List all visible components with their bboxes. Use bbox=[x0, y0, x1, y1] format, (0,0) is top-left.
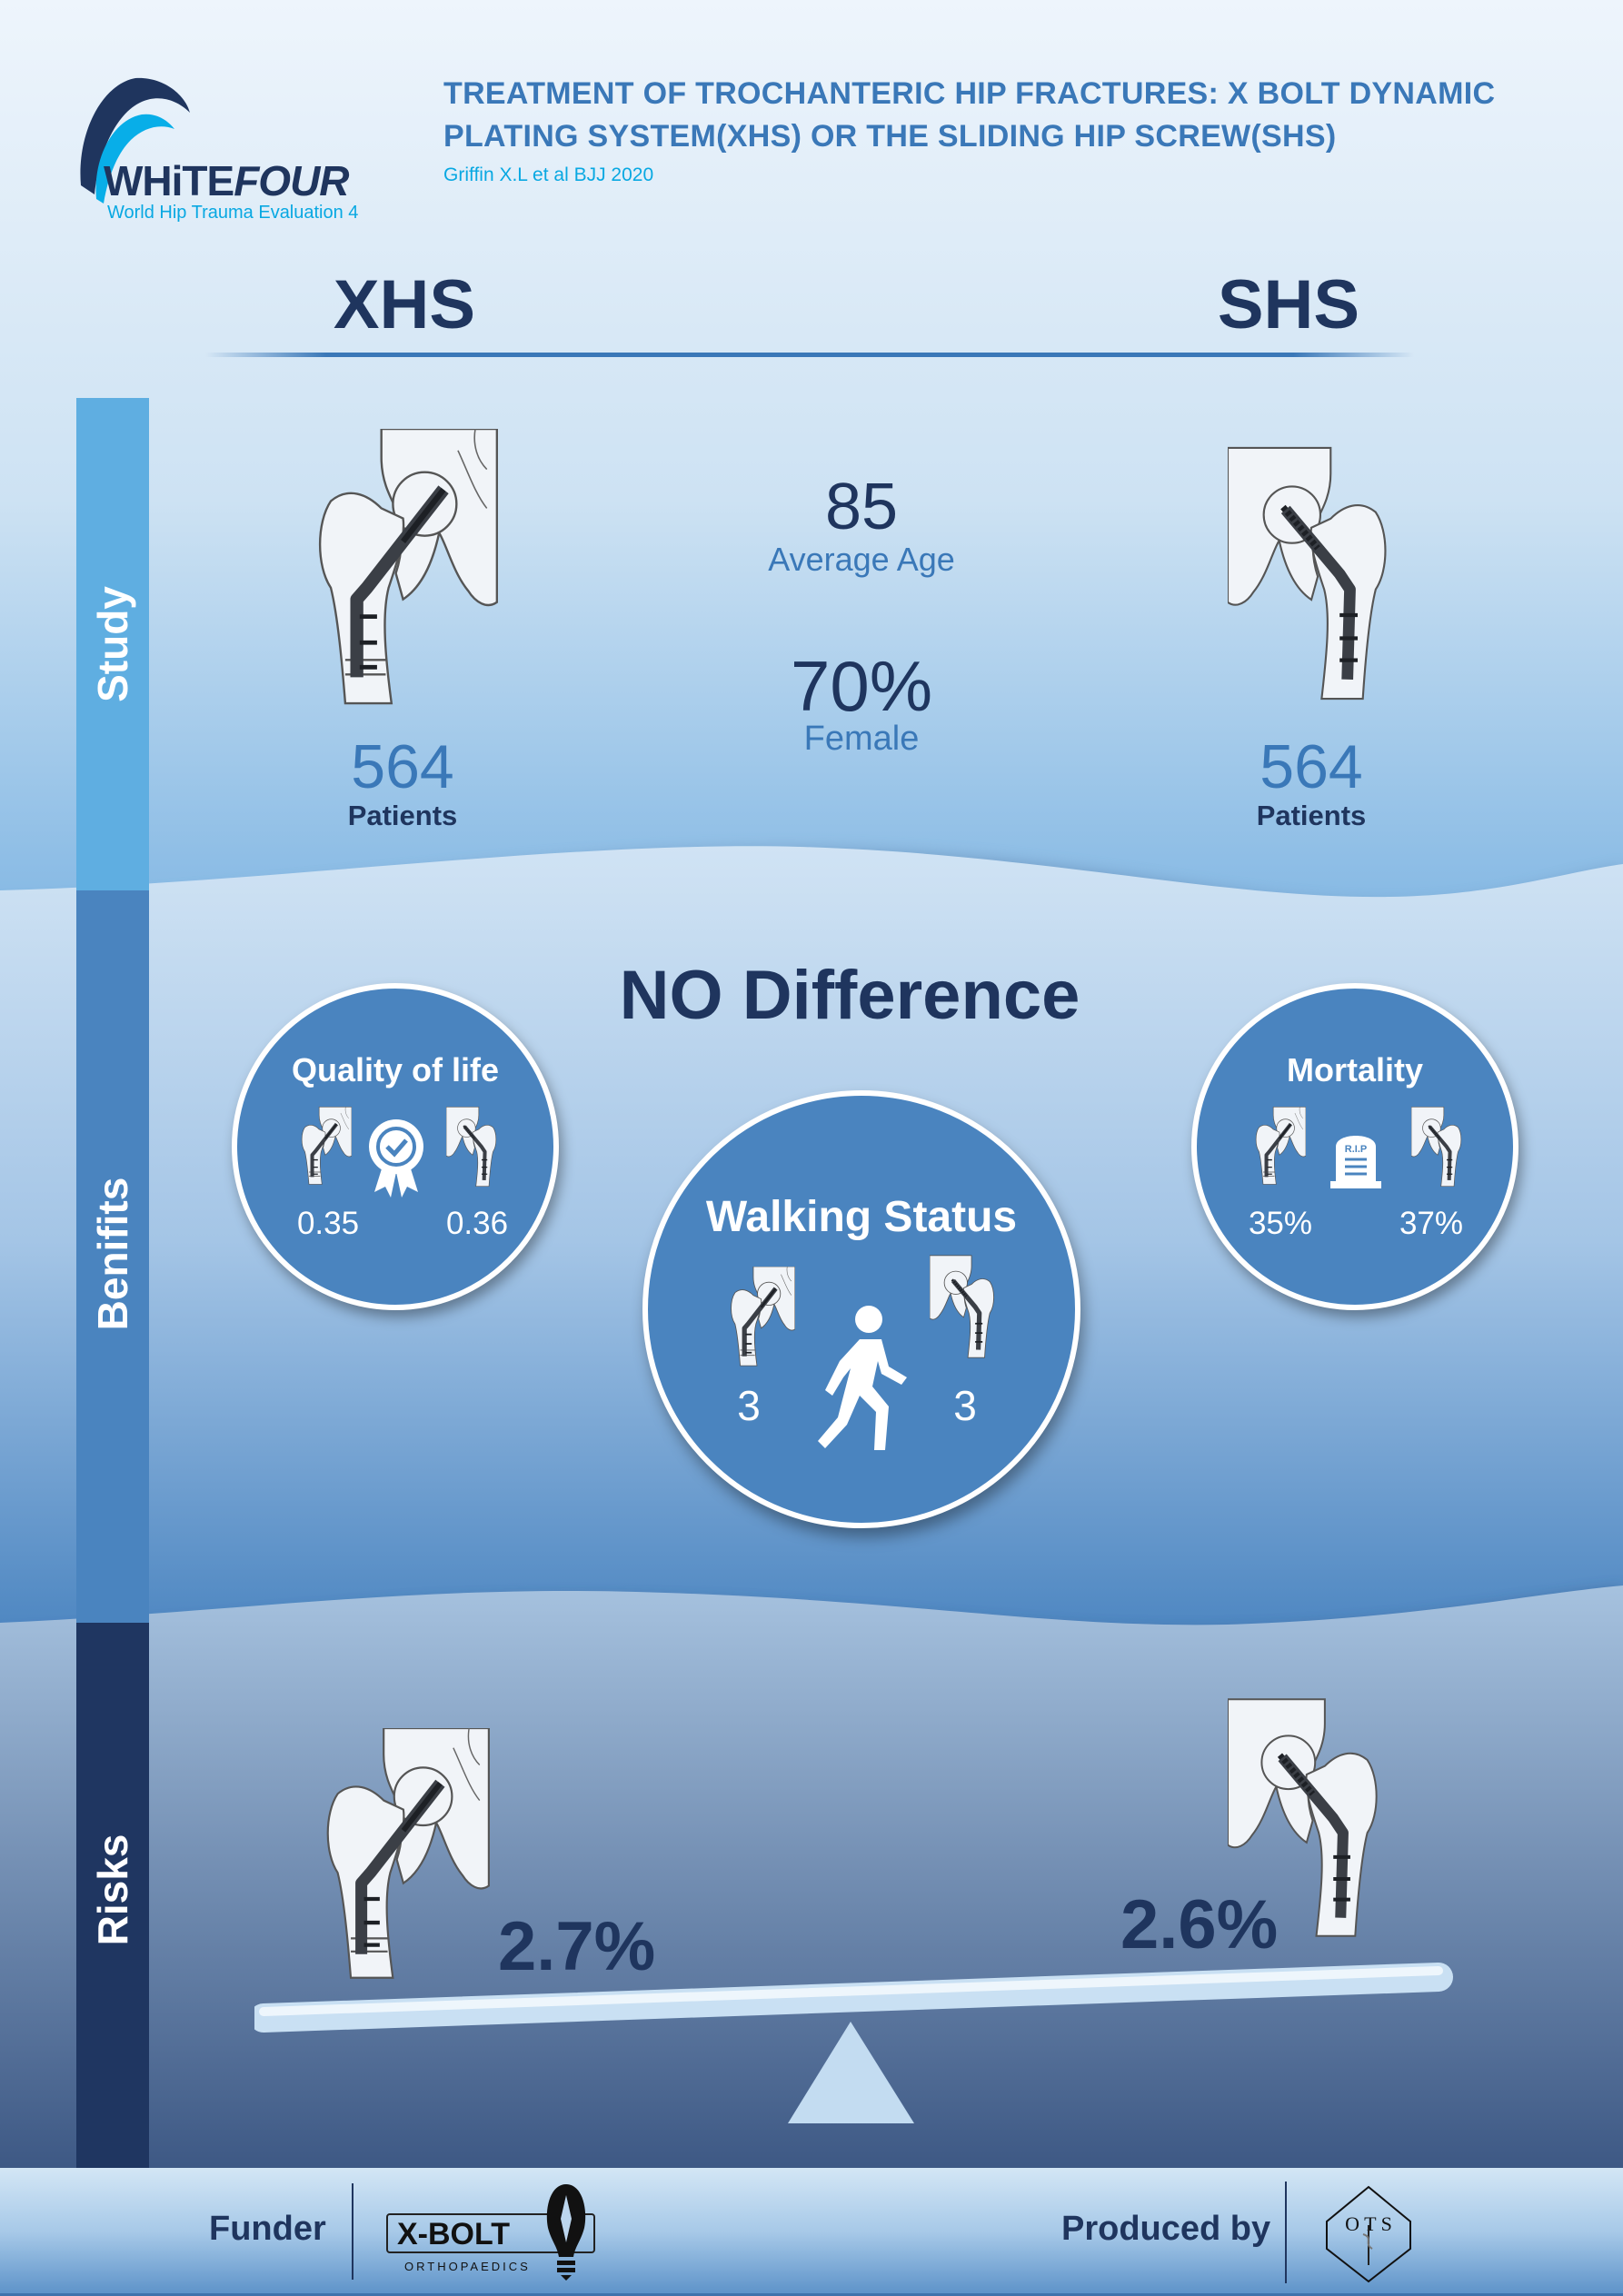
icon: SHS hip on seesaw bbox=[1228, 1698, 1378, 1937]
stat: average age: Average Age bbox=[768, 541, 955, 578]
logo: OTS hexagon: O T S bbox=[1345, 2212, 1392, 2235]
stat: XHS patients: 564 bbox=[351, 732, 454, 801]
icon: XHS hip bbox=[318, 429, 498, 705]
heading XHS: XHS bbox=[334, 266, 475, 343]
stat: XHS risk: 2.7% bbox=[498, 1908, 655, 1985]
footer bbox=[209, 2182, 1411, 2283]
stat: XHS patients: Patients bbox=[348, 800, 457, 831]
icon: walking person bbox=[818, 1306, 907, 1450]
logo: WHITEFOUR: WHiTEFOUR bbox=[104, 157, 349, 204]
stat: XHS patients bbox=[348, 732, 457, 831]
panel: mortality circle bbox=[1191, 983, 1518, 1310]
side label: Study bbox=[76, 398, 149, 890]
title: TREATMENT OF TROCHANTERIC HIP FRACTURES: X BOLT DYNAMIC bbox=[443, 76, 1495, 111]
icon: XHS hip on seesaw bbox=[327, 1728, 490, 1979]
panel: quality of life circle: 0.35 bbox=[297, 1206, 359, 1241]
heading: NO Difference: NO Difference bbox=[620, 957, 1080, 1034]
stat: female: 70% bbox=[791, 646, 932, 726]
panel: quality of life circle: Quality of life bbox=[292, 1051, 499, 1088]
side label: Benifits: Benifits bbox=[89, 1178, 136, 1330]
icon: tombstone: R.I.P bbox=[1345, 1144, 1367, 1155]
footer: Produced by bbox=[1061, 2210, 1270, 2248]
panel: walking status circle: 3 bbox=[737, 1382, 761, 1429]
stat: average age: 85 bbox=[825, 471, 898, 543]
panel: quality of life circle bbox=[232, 983, 559, 1310]
title: PLATING SYSTEM(XHS) OR THE SLIDING HIP SCREW(SHS) bbox=[443, 119, 1336, 154]
panel: walking status circle: 3 bbox=[953, 1382, 977, 1429]
title bbox=[443, 76, 1495, 154]
citation: Griffin X.L et al BJJ 2020 bbox=[443, 164, 653, 185]
panel: walking status circle: Walking Status bbox=[706, 1193, 1017, 1241]
stat: female: Female bbox=[804, 720, 919, 758]
side label: Benifits bbox=[76, 890, 149, 1623]
panel: mortality circle: 37% bbox=[1399, 1206, 1463, 1241]
logo: WHITEFOUR: World Hip Trauma Evaluation 4 bbox=[107, 203, 358, 223]
logo: X-BOLT orthopaedics bbox=[386, 2184, 595, 2281]
side label: Study: Study bbox=[89, 586, 136, 702]
stat: SHS patients: Patients bbox=[1257, 800, 1366, 831]
side label: Risks bbox=[76, 1623, 149, 2168]
footer: Funder bbox=[209, 2210, 326, 2248]
icon: award ribbon bbox=[369, 1119, 423, 1198]
logo: WHITEFOUR bbox=[80, 78, 358, 223]
panel: study bbox=[318, 429, 1387, 831]
stat: SHS risk: 2.6% bbox=[1120, 1886, 1278, 1963]
seesaw beam bbox=[254, 1963, 1453, 2123]
panel: quality of life circle: 0.36 bbox=[446, 1206, 508, 1241]
panel: mortality circle: Mortality bbox=[1287, 1051, 1423, 1088]
side label: Risks: Risks bbox=[89, 1834, 136, 1945]
stat: average age bbox=[768, 471, 955, 578]
icon: SHS hip bbox=[1228, 447, 1387, 700]
panel: risks seesaw bbox=[254, 1698, 1453, 2123]
panel: walking status circle bbox=[642, 1090, 1080, 1528]
logo: OTS hexagon bbox=[1326, 2186, 1411, 2282]
panel: mortality circle: 35% bbox=[1249, 1206, 1312, 1241]
logo: X-BOLT orthopaedics: X-BOLT bbox=[397, 2217, 510, 2251]
logo: X-BOLT orthopaedics: ORTHOPAEDICS bbox=[404, 2260, 531, 2273]
heading SHS: SHS bbox=[1218, 266, 1359, 343]
stat: SHS patients bbox=[1257, 732, 1366, 831]
icon: tombstone bbox=[1330, 1136, 1381, 1188]
stat: SHS patients: 564 bbox=[1260, 732, 1363, 801]
